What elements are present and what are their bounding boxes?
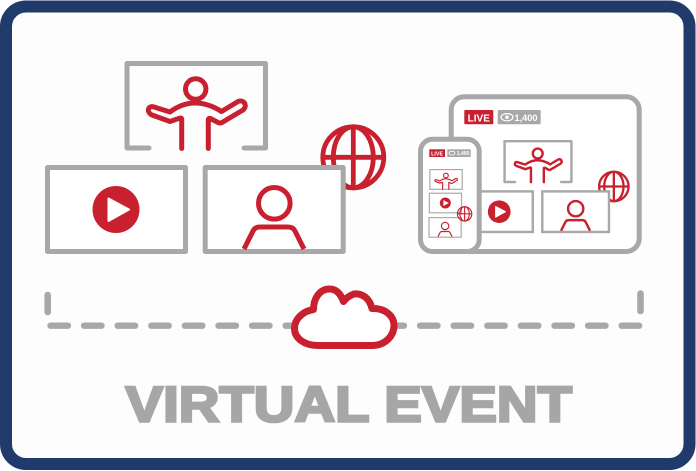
badge: live <box>464 110 493 124</box>
badge: viewer count <box>498 110 541 124</box>
screen: presenter <box>127 64 266 148</box>
device: tablet showing the event <box>451 97 639 252</box>
icon: cloud <box>294 289 394 346</box>
badge: viewers small: 1,400 <box>457 151 470 157</box>
network line: dashed connection with end ticks <box>48 294 641 326</box>
tablet mini video wall <box>466 141 629 232</box>
icon: phone globe <box>457 207 472 221</box>
title: VIRTUAL EVENT <box>126 375 572 432</box>
screen group: large video wall <box>48 64 384 252</box>
badge: live small: LIVE <box>431 152 443 158</box>
badge: viewer count: 1,400 <box>514 113 538 123</box>
badge: live: LIVE <box>468 113 490 124</box>
phone screen: video <box>429 193 462 213</box>
screen: attendee <box>205 168 343 252</box>
icon: global globe <box>323 127 384 188</box>
screen: video with play button <box>48 168 186 252</box>
phone screen: presenter <box>430 170 462 189</box>
device: phone showing the event <box>420 139 479 252</box>
phone screen: attendee <box>429 218 461 237</box>
